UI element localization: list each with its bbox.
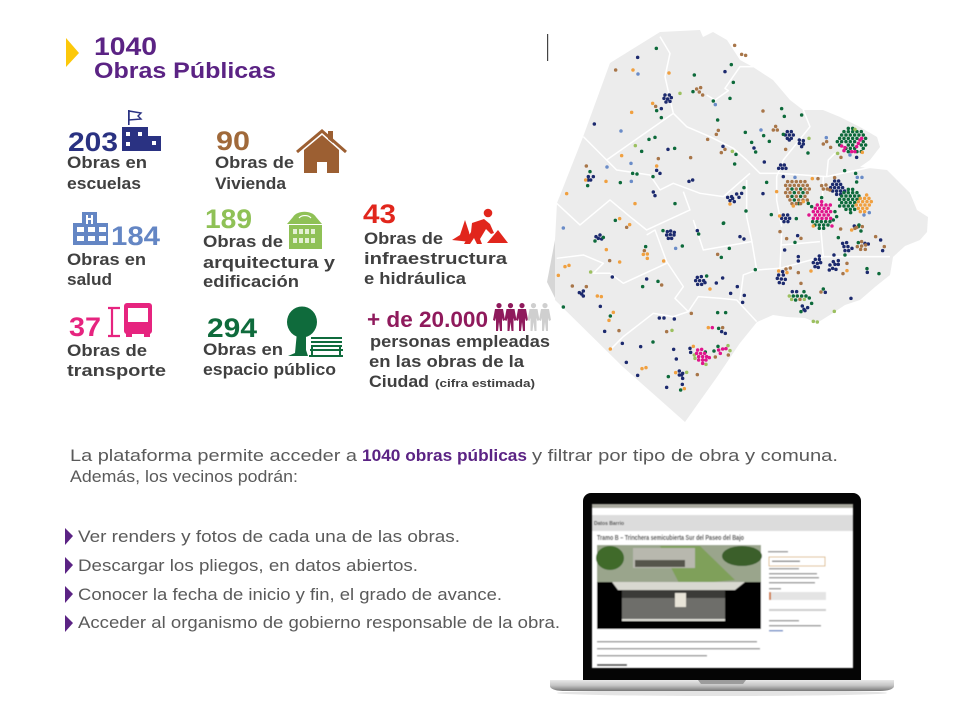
dots: blue (563, 74, 869, 228)
intro paragraph: y filtrar por tipo de obra y comuna. (532, 446, 838, 465)
stat: 20.000 personas: en las obras de la (369, 353, 525, 371)
stat: 20.000 personas: (cifra estimada) (435, 378, 535, 390)
dots: magenta (697, 328, 726, 363)
laptop shadow (557, 690, 887, 696)
icon: green building (287, 212, 322, 249)
dots: orange (567, 70, 871, 226)
bullet 3: Conocer la fecha de inicio y fin, el grado de avance. (78, 585, 502, 604)
stat: 37 transporte: transporte (67, 362, 166, 380)
icon: bus and shelter (108, 303, 152, 337)
stat: 203 escuelas: escuelas (67, 175, 141, 193)
bullet list (65, 527, 560, 632)
stat: 294 espacio publico: Obras en (203, 341, 283, 359)
dots: blue (670, 243, 681, 254)
info sidebar (768, 551, 826, 632)
stat: 184 salud: Obras en (67, 251, 146, 269)
stat: 20.000 personas: + de 20.000 (367, 307, 488, 332)
site header: Datos Barrio (594, 521, 624, 527)
stat: 203 escuelas: Obras en (67, 154, 147, 172)
stat: 20.000 personas (367, 303, 551, 391)
stat: 184 salud: 184 (111, 221, 160, 251)
stat: 189 arquitectura (203, 204, 336, 291)
intro paragraph: 1040 obras públicas (362, 446, 527, 465)
stat: 90 vivienda: Vivienda (215, 175, 287, 193)
dots: light green (635, 93, 855, 153)
stat: 184 salud (67, 212, 160, 289)
stat: 189 arquitectura: arquitectura y (203, 254, 336, 272)
stat: 184 salud: salud (67, 271, 112, 289)
dots: navy (588, 57, 857, 226)
page title: Tramo B – Trinchera semicubierta Sur del Paseo del Bajo (597, 535, 744, 542)
dots: orange (558, 230, 852, 389)
heading label: Obras Públicas (94, 58, 276, 83)
stat: 43 infraestructura: 43 (363, 199, 396, 229)
heading number: 1040 (94, 33, 157, 61)
stat: 294 espacio publico (203, 306, 343, 379)
map of Buenos Aires with public works dots (547, 30, 928, 422)
stat: 43 infraestructura (363, 199, 508, 288)
icon: yellow arrow (66, 38, 79, 67)
bullet 1: Ver renders y fotos de cada una de las obras. (78, 527, 460, 546)
stat: 20.000 personas: Ciudad (369, 373, 429, 391)
heading: 1040 Obras Públicas (66, 33, 276, 83)
dots: green (588, 48, 866, 228)
laptop with platform screenshot (550, 493, 894, 696)
stat: 203 escuelas (67, 110, 161, 193)
dots: magenta (809, 138, 862, 226)
icon: road worker (452, 209, 508, 244)
icon: tree and bench (287, 306, 343, 357)
map landmass (555, 30, 928, 422)
bullet 4: Acceder al organismo de gobierno responsable de la obra. (78, 613, 560, 632)
stat: 43 infraestructura: infraestructura (364, 250, 508, 268)
site header (592, 515, 853, 531)
comuna borders (557, 37, 890, 350)
dots: brown (572, 227, 884, 375)
stat: 37 transporte: 37 (69, 312, 101, 342)
render image (596, 545, 762, 629)
stat: 90 vivienda: Obras de (215, 154, 294, 172)
dots: light green (591, 272, 834, 372)
dots: brown (586, 45, 841, 227)
stat: 189 arquitectura: edificación (203, 273, 299, 291)
laptop base (550, 680, 894, 691)
vertical cursor line (547, 34, 548, 61)
browser bar (592, 504, 853, 508)
intro paragraph: Además, los vecinos podrán: (70, 467, 298, 486)
intro paragraph: La plataforma permite acceder a (70, 446, 358, 465)
stat: 43 infraestructura: e hidráulica (364, 270, 467, 288)
stat: 90 vivienda (215, 126, 346, 193)
bullet 2: Descargar los pliegos, en datos abiertos. (78, 556, 418, 575)
description text lines (597, 641, 760, 666)
stat: 203 escuelas: 203 (68, 127, 118, 157)
dots: navy (579, 231, 883, 387)
stat: 90 vivienda: 90 (216, 126, 250, 156)
stat: 189 arquitectura: Obras de (203, 233, 283, 251)
stat: 20.000 personas: personas empleadas (370, 333, 550, 351)
icon: hospital (73, 212, 108, 245)
icon: people (493, 303, 551, 331)
stat: 43 infraestructura: Obras de (364, 230, 443, 248)
intro paragraph (70, 446, 838, 486)
map shadow edge (547, 240, 555, 298)
stat: 294 espacio publico: espacio público (203, 361, 336, 379)
laptop screen (592, 504, 853, 668)
dots: green (563, 223, 879, 390)
icon: school (122, 110, 161, 151)
stat: 294 espacio publico: 294 (207, 313, 257, 343)
stat: 189 arquitectura: 189 (205, 204, 252, 234)
stat: 37 transporte: Obras de (67, 342, 147, 360)
laptop bezel (583, 493, 861, 680)
icon: house (297, 131, 346, 173)
stat: 37 transporte (67, 303, 166, 380)
dots: south (558, 223, 884, 390)
dots: north and centre (563, 45, 871, 228)
